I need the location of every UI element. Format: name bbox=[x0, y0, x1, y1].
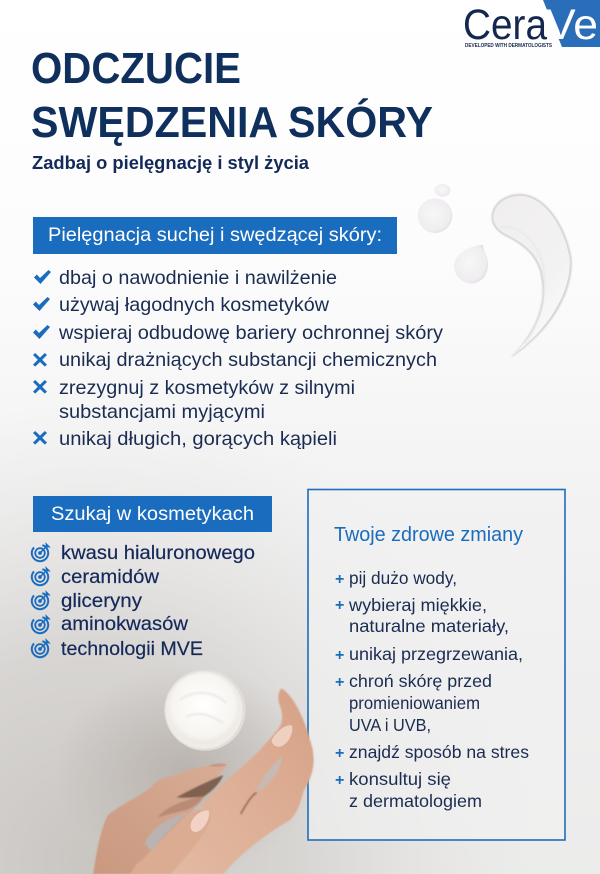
item: strong cleansers bbox=[33, 377, 355, 423]
item: hydration: dbaj o nawodnienie i nawilżenie bbox=[59, 267, 337, 289]
item: avoid chemicals: unikaj drażniących substancji chemicznych bbox=[59, 349, 437, 371]
photo: jar of cream and hands bbox=[93, 669, 314, 874]
nail: hand A bbox=[208, 763, 227, 767]
thumb bbox=[130, 810, 211, 874]
item: hyaluronic acid: kwasu hialuronowego bbox=[61, 542, 255, 564]
heading bar: skin care: Pielęgnacja suchej i swędzącej skóry: bbox=[48, 224, 382, 246]
item: konsultuj się bbox=[349, 769, 451, 789]
nail: index bbox=[272, 725, 292, 747]
item: promieniowaniem bbox=[349, 693, 480, 713]
panel: healthy changes bbox=[308, 490, 565, 840]
plus markers: + bbox=[335, 597, 344, 614]
gap between fingers of hand B bbox=[255, 757, 282, 793]
item bbox=[349, 671, 492, 735]
item: glycerin bbox=[30, 590, 142, 612]
cream swoosh and droplets bbox=[418, 184, 572, 358]
heading bar: ingredients: Szukaj w kosmetykach bbox=[51, 503, 254, 525]
jar bbox=[164, 669, 246, 751]
item: znajdź sposób na stres bbox=[349, 742, 529, 762]
hand A: dark gap under index finger bbox=[177, 775, 223, 798]
logo: CeraVe bbox=[463, 0, 600, 49]
title bbox=[31, 44, 433, 147]
logo: CeraVe: Ve bbox=[546, 1, 598, 49]
item: ceramides: ceramidów bbox=[61, 566, 160, 588]
grey gap between hands bbox=[145, 813, 187, 852]
item: wybieraj miękkie, bbox=[348, 595, 487, 615]
plus markers bbox=[335, 571, 344, 789]
hand A: second finger bbox=[157, 796, 203, 817]
hand B: back of hand and fingers bbox=[173, 688, 314, 874]
heading bar: ingredients bbox=[33, 496, 272, 532]
plus markers: + bbox=[335, 674, 344, 691]
logo: CeraVe: DEVELOPED WITH DERMATOLOGISTS bbox=[465, 43, 552, 49]
item: amino acids: aminokwasów bbox=[61, 613, 189, 635]
title: ODCZUCIE bbox=[31, 44, 241, 93]
title: SWĘDZENIA SKÓRY bbox=[31, 97, 433, 147]
item bbox=[348, 595, 509, 636]
plus markers: + bbox=[335, 647, 344, 664]
item: hot baths: unikaj długich, gorących kąpieli bbox=[59, 428, 337, 450]
nail: thumb bbox=[191, 811, 209, 832]
item: strong cleansers: substancjami myjącymi bbox=[59, 401, 265, 423]
logo: CeraVe: Cera bbox=[463, 1, 547, 49]
heading: Twoje zdrowe zmiany bbox=[334, 524, 523, 546]
item: z dermatologiem bbox=[349, 791, 482, 811]
hands bbox=[93, 688, 314, 874]
plus markers: + bbox=[335, 745, 344, 762]
item: UVA i UVB, bbox=[349, 715, 431, 735]
item: strong cleansers: zrezygnuj z kosmetyków z silnymi bbox=[59, 377, 355, 399]
item: gentle cosmetics: używaj łagodnych kosmetyków bbox=[59, 294, 330, 316]
item: MVE: technologii MVE bbox=[61, 638, 203, 660]
plus markers: + bbox=[335, 772, 344, 789]
heading bar: skin care bbox=[33, 217, 397, 254]
item: pij dużo wody, bbox=[349, 568, 457, 588]
plus markers: + bbox=[335, 571, 344, 588]
item: unikaj przegrzewania, bbox=[349, 644, 523, 664]
item: barrier: wspieraj odbudowę bariery ochronnej skóry bbox=[58, 322, 443, 344]
item: naturalne materiały, bbox=[349, 616, 509, 636]
item bbox=[349, 769, 482, 811]
list: care do and don't bbox=[33, 267, 443, 450]
crease bbox=[241, 793, 257, 814]
list: ingredients bbox=[30, 542, 255, 660]
subtitle: Zadbaj o pielęgnację i styl życia bbox=[32, 153, 310, 173]
item: chroń skórę przed bbox=[349, 671, 492, 691]
item: glycerin: gliceryny bbox=[61, 590, 142, 612]
hand A: fingers bbox=[93, 764, 227, 874]
